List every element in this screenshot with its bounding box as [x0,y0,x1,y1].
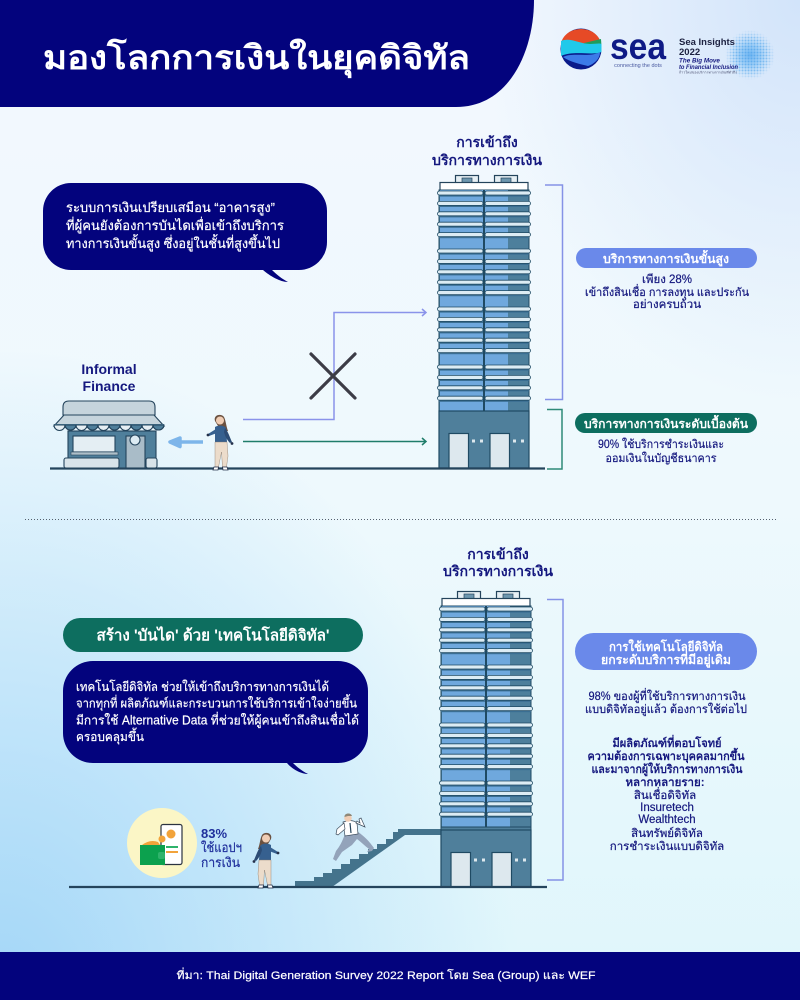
arrow: path to basic services [243,438,426,445]
tagline: connecting the dots [614,63,662,69]
pill: advanced services [576,248,757,268]
bracket: advanced services [545,185,562,400]
icon: finance app [127,808,197,878]
tower: top building [438,176,530,468]
label: informal finance: Informal [81,361,137,377]
person: woman at stairs [253,833,279,888]
pill: build stairs with digital technology [63,618,363,652]
heading: access to financial services (bottom): การเข้าถึง [467,546,529,562]
pill: digital technology upgrades services [575,633,757,670]
heading: access to financial services (top): การเข้าถึง [456,134,518,150]
title: มองโลกการเงินในยุคดิจิทัล [43,38,470,79]
text: basic services stat: ออมเงินในบัญชีธนาคาร [606,452,716,465]
text: advanced services stat: อย่างครบถ้วน [633,298,701,311]
text: advanced services stat: เพียง 28% [642,273,692,286]
text: 83 percent use finance apps [201,826,242,870]
icon: halftone glow [725,30,775,80]
footer source text: ที่มา: Thai Digital Generation Survey 2022 Report โดย Sea (Group) และ WEF [176,967,596,982]
speech bubble: digital technology: มีการใช้ Alternative Data ที่ช่วยให้ผู้คนเข้าถึงสินเชื่อได้ [76,712,359,728]
heading: access to financial services (top) [432,134,542,168]
speech bubble: tall building: ระบบการเงินเปรียบเสมือน “อาคารสูง” [66,200,275,216]
person: man climbing stairs [333,813,374,861]
logo: sea insights 2022 [679,30,775,80]
icon: sea globe [560,28,602,70]
pill: basic services: บริการทางการเงินระดับเบื้องต้น [584,414,749,431]
icon: cross mark [311,354,355,398]
pill: build stairs with digital technology: สร้าง 'บันได' ด้วย 'เทคโนโลยีดิจิทัล' [96,626,330,644]
tower: bottom building [440,592,532,887]
pill: digital technology upgrades services: ยกระดับบริการที่มีอยู่เดิม [601,651,731,668]
text: basic services stat [598,438,724,465]
ground line: top scene [50,467,545,470]
event name: Sea Insights [679,37,735,48]
text: 83 percent use finance apps: 83% [201,826,227,841]
heading: access to financial services (bottom) [443,546,553,579]
label: informal finance: Finance [83,378,136,394]
text: product list: หลากหลายราย: [625,777,705,789]
person: woman at shop [207,415,233,470]
text: 98 percent stat: 98% ของผู้ที่ใช้บริการทางการเงิน [588,688,746,703]
logo: sea insights 2022: The Big Move [679,58,720,64]
ground line: bottom scene [69,886,547,888]
stairs [295,829,441,887]
logo: sea [560,26,666,70]
heading: access to financial services (bottom): บริการทางการเงิน [443,563,553,579]
text: 83 percent use finance apps: การเงิน [201,855,240,870]
logo: sea insights 2022: to Financial Inclusion [679,64,738,71]
text: advanced services stat [585,273,749,311]
text: advanced services stat: เข้าถึงสินเชื่อ การลงทุน และประกัน [585,284,749,299]
label: informal finance [81,361,137,394]
footer bar [0,952,800,1000]
pill: digital technology upgrades services: การใช้เทคโนโลยีดิจิทัล [609,639,723,654]
heading: access to financial services (top): บริการทางการเงิน [432,152,542,168]
speech bubble: digital technology [63,661,368,774]
logo: sea insights 2022: ก้าวใหม่ของบริการทางการเงินที่ทั่วถึง [679,70,737,74]
text: product list: Insuretech [640,802,694,814]
header banner [0,0,534,107]
text: product list: มีผลิตภัณฑ์ที่ตอบโจทย์ [612,734,722,750]
text: product list: สินทรัพย์ดิจิทัล [631,826,703,840]
icon: shop [54,401,164,468]
speech bubble: tall building: ทางการเงินขั้นสูง ซึ่งอยู่ในชั้นที่สูงขึ้นไป [66,234,280,252]
logo: sea insights 2022: 2022 [679,47,700,58]
text: product list: สินเชื่อดิจิทัล [634,787,696,802]
arrow: to informal finance [170,438,203,446]
speech bubble: tall building: ที่ผู้คนยังต้องการบันไดเพื่อเข้าถึงบริการ [66,217,284,234]
text: 83 percent use finance apps: ใช้แอปฯ [201,840,242,855]
section divider [25,518,777,520]
arrow: blocked path to upper floors [243,309,426,420]
wordmark: sea [610,26,666,67]
speech bubble: digital technology: เทคโนโลยีดิจิทัล ช่วยให้เข้าถึงบริการทางการเงินได้ [76,679,329,694]
bracket: digital services [547,600,563,880]
pill: advanced services: บริการทางการเงินขั้นสูง [603,249,729,267]
text: product list [588,734,745,853]
text: 98 percent stat: แบบดิจิทัลอยู่แล้ว ต้องการใช้ต่อไป [585,703,747,716]
speech bubble: digital technology: ครอบคลุมขึ้น [76,727,144,745]
pill: basic services [575,413,757,433]
text: product list: Wealthtech [638,814,696,826]
text: product list: และมาจากผู้ให้บริการทางการเงิน [592,762,743,777]
speech bubble: tall building [43,183,327,282]
text: product list: ความต้องการเฉพาะบุคคลมากขึ้น [588,747,745,764]
text: basic services stat: 90% ใช้บริการชำระเงินและ [598,438,724,451]
text: 98 percent stat [585,688,747,716]
bracket: basic services [547,410,562,469]
speech bubble: digital technology: จากทุกที่ ผลิตภัณฑ์และกระบวนการใช้บริการเข้าใจง่ายขึ้น [76,694,357,712]
text: product list: การชำระเงินแบบดิจิทัล [610,840,724,853]
